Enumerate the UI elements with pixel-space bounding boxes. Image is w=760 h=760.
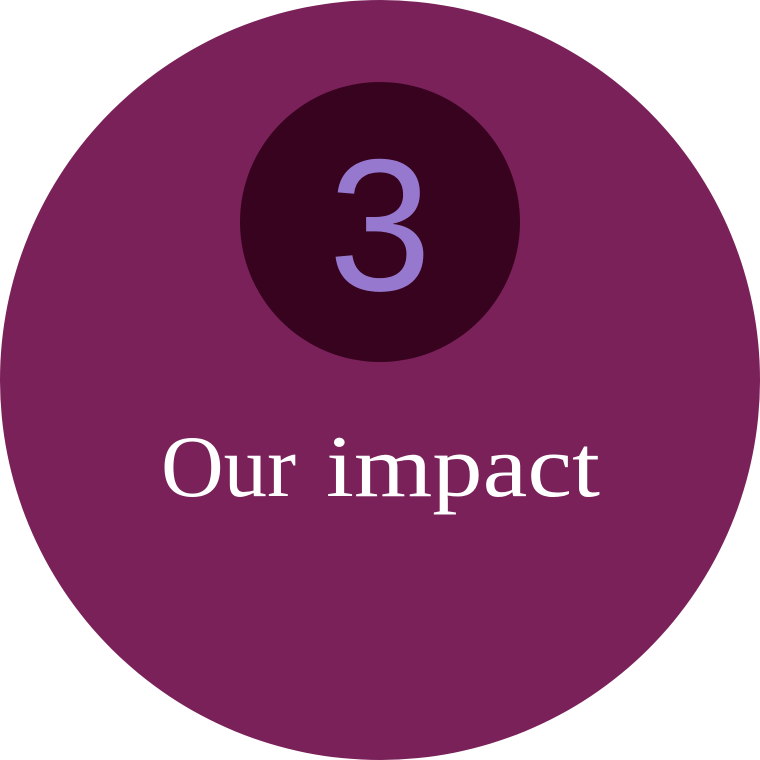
dark number circle [240,82,520,362]
number 3: 3 [328,120,432,330]
heading: Our impact: Our [161,419,296,516]
heading: Our impact [161,419,600,516]
heading: Our impact: impact [326,419,600,516]
